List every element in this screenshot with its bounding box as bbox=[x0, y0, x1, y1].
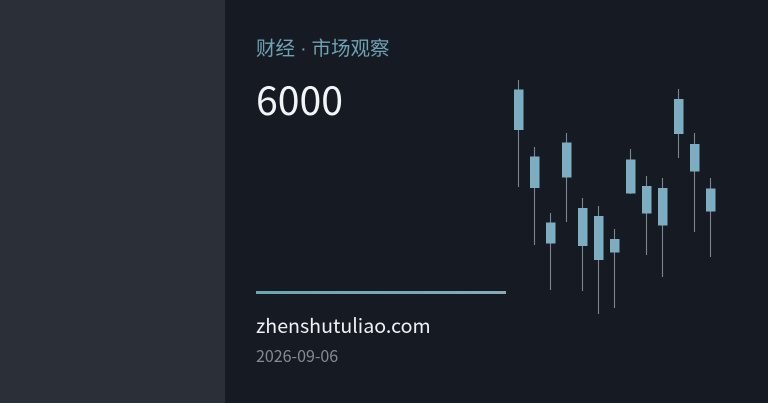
accent rule bbox=[256, 291, 506, 294]
eyebrow: category heading: 财经 · 市场观察 bbox=[256, 32, 389, 61]
date text: 2026-09-06 bbox=[256, 343, 338, 367]
panel: left sidebar bbox=[0, 0, 225, 403]
website text: zhenshutuliao.com bbox=[256, 310, 431, 339]
title: 6000 bbox=[256, 71, 343, 127]
